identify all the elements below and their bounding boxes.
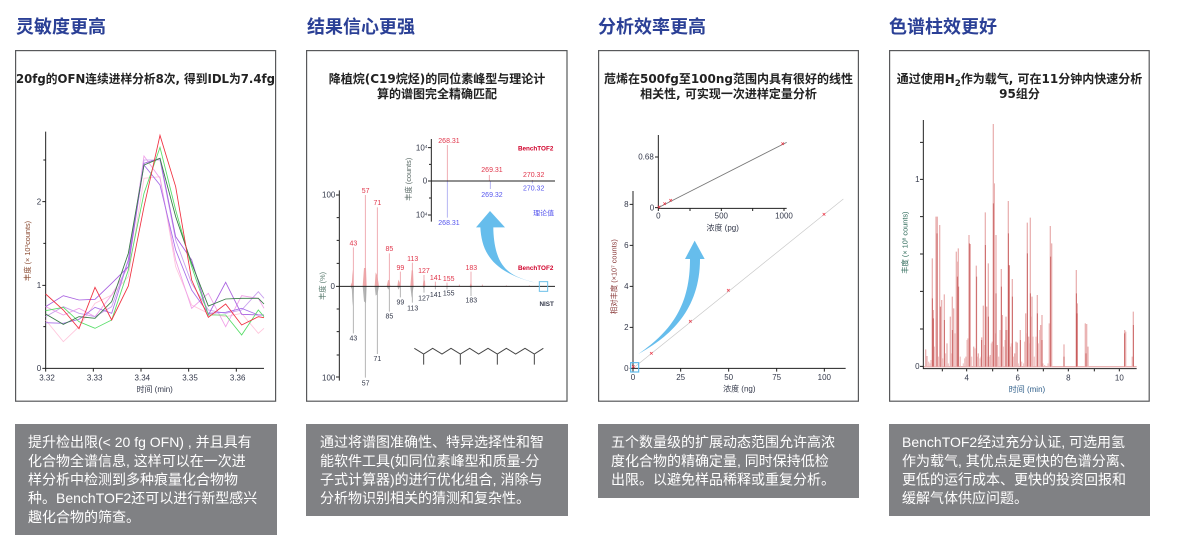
chart inset: isotope pattern: 270.32: [523, 172, 544, 179]
panel title: fluorene linearity: 苊烯在500fg至100ng范围内具有很好的线性: [604, 71, 853, 86]
text block: sensitivity: 化合物全谱信息, 这样可以在一次进: [28, 453, 246, 469]
blue zoom box: [631, 363, 639, 372]
chart inset: isotope pattern: 10: [416, 143, 425, 152]
text block: column performance: BenchTOF2经过充分认证, 可选用氢: [902, 434, 1125, 450]
arrow: zoom to low range: [638, 241, 705, 354]
text block: confidence: 分析物识别相关的猜测和复杂性。: [320, 490, 530, 506]
chart: overlaid OFN injections: 3.36: [230, 374, 246, 383]
chart: calibration curve ng: 相对丰度 (×10: [610, 268, 619, 314]
panel title: fluorene linearity: [604, 71, 853, 101]
chart inset: calibration curve pg: 0: [650, 203, 655, 212]
chart: overlaid OFN injections: 3.33: [87, 374, 103, 383]
chart: total ion chromatogram: [900, 120, 1137, 394]
chart: total ion chromatogram: 8: [901, 237, 906, 240]
text block: efficiency: [598, 424, 859, 498]
chart: calibration curve ng: 浓度 (ng): [723, 383, 756, 393]
chart inset: isotope pattern: 270.32: [523, 186, 544, 193]
chart inset: isotope pattern: 丰度 (counts): [404, 158, 413, 201]
text block: confidence: 能软件工具(如同位素峰型和质量-分: [320, 453, 539, 469]
text block: efficiency: 出限。以避免样品稀释或重复分析。: [611, 472, 835, 488]
chart: total ion chromatogram: counts): [900, 212, 909, 238]
chart: calibration curve ng: 100: [818, 373, 832, 382]
chart inset: isotope pattern: 268.31: [438, 138, 460, 145]
panel title: hydrogen carrier: 2: [955, 79, 961, 89]
chart: overlaid OFN injections: 3: [24, 245, 29, 248]
panel title: hydrogen carrier: 作为载气, 可在11分钟内快速分析: [961, 71, 1142, 86]
chart inset: calibration curve pg: [638, 135, 793, 232]
chart inset: isotope pattern: 269.32: [481, 192, 503, 199]
panel title: OFN IDL: 20fg的OFN连续进样分析8次, 得到IDL为7.4fg: [16, 71, 275, 86]
chart: mirror mass spectrum: 100: [322, 373, 336, 382]
chart: calibration curve ng: 25: [676, 373, 686, 382]
chart: mirror mass spectrum: 99: [396, 265, 404, 272]
chart: mirror mass spectrum: 丰度 (%): [318, 272, 327, 300]
chart: calibration curve ng: 4: [624, 282, 629, 291]
chart inset: isotope pattern: 10: [416, 211, 425, 220]
chart inset: isotope pattern: 0: [423, 177, 428, 186]
heading: column performance: 色谱柱效更好: [889, 16, 997, 37]
panel: efficiency: [599, 51, 858, 401]
text block: column performance: 更低的运行成本、更快的投资回报和: [902, 472, 1126, 488]
chart inset: calibration curve pg: 0.68: [638, 153, 654, 162]
panel title: hydrogen carrier: [897, 71, 1142, 101]
chart: mirror mass spectrum: 183: [466, 298, 477, 305]
chart: overlaid OFN injections: 时间 (min): [136, 384, 173, 394]
chart: overlaid OFN injections: 丰度 (× 10: [23, 248, 32, 281]
chart inset: isotope pattern: 4: [425, 144, 428, 149]
chart: overlaid OFN injections: [23, 132, 264, 394]
chart: mirror mass spectrum: 155: [443, 276, 455, 283]
chart: total ion chromatogram: 0: [915, 362, 920, 371]
icon: pristane structure: [414, 348, 543, 365]
chart inset: calibration curve pg: 0: [656, 212, 661, 221]
chart: mirror mass spectrum: BenchTOF2: [518, 265, 554, 272]
chart: total ion chromatogram: 6: [1015, 373, 1020, 382]
panel: column performance: [890, 51, 1149, 401]
panel title: fluorene linearity: 相关性, 可实现一次进样定量分析: [640, 86, 817, 101]
chart inset: calibration curve pg: 浓度 (pg): [706, 222, 739, 232]
chart: mirror mass spectrum: 43: [349, 241, 357, 248]
text block: sensitivity: 样分析中检测到多种痕量化合物物: [28, 472, 238, 488]
text block: sensitivity: 趣化合物的筛查。: [28, 509, 140, 525]
text block: efficiency: 五个数量级的扩展动态范围允许高浓: [611, 434, 835, 450]
chart inset: calibration curve pg: 500: [715, 212, 729, 221]
chart: mirror mass spectrum: 0: [330, 282, 335, 291]
chart: mirror mass spectrum: 141: [430, 292, 442, 299]
chart inset: calibration curve pg: 1000: [775, 212, 793, 221]
blue zoom box: [539, 282, 548, 291]
panel title: pristane: 降植烷(C19烷烃)的同位素峰型与理论计: [329, 71, 545, 86]
chart: total ion chromatogram: 8: [1066, 373, 1071, 382]
text block: sensitivity: 种。BenchTOF2还可以进行新型感兴: [28, 490, 257, 506]
chart: mirror mass spectrum: 85: [385, 314, 393, 321]
chart: mirror mass spectrum: 141: [430, 275, 442, 282]
chart: mirror mass spectrum: 113: [407, 306, 418, 313]
chart: mirror mass spectrum: 127: [418, 268, 430, 275]
chart: calibration curve ng: 2: [624, 323, 629, 332]
chart: mirror mass spectrum: 71: [373, 200, 381, 207]
chart: mirror mass spectrum: 183: [466, 265, 477, 272]
chart: calibration curve ng: 75: [772, 373, 782, 382]
chart: calibration curve ng: 7: [611, 265, 616, 268]
chart: total ion chromatogram: 1: [915, 175, 920, 184]
chart inset: isotope pattern: [404, 138, 555, 227]
text block: efficiency: 度化合物的精确定量, 同时保持低检: [611, 453, 829, 469]
chart: mirror mass spectrum: 127: [418, 296, 430, 303]
heading: efficiency: 分析效率更高: [598, 16, 706, 37]
chart: mirror mass spectrum: NIST: [539, 301, 554, 308]
chart: calibration curve ng: counts): [610, 239, 619, 265]
chart: total ion chromatogram: 4: [964, 373, 969, 382]
chart: total ion chromatogram: 10: [1115, 373, 1124, 382]
chart inset: isotope pattern: 268.31: [438, 220, 460, 227]
chart: calibration curve ng: 6: [624, 241, 629, 250]
chart: mirror mass spectrum: 85: [385, 246, 393, 253]
text block: sensitivity: 提升检出限(< 20 fg OFN) , 并且具有: [28, 434, 252, 450]
chart: mirror mass spectrum: 57: [362, 188, 370, 195]
chart inset: isotope pattern: BenchTOF2: [518, 146, 554, 153]
text block: column performance: 作为载气, 其优点是更快的色谱分离、: [902, 453, 1134, 469]
chart: mirror mass spectrum: 71: [373, 356, 381, 363]
chart inset: isotope pattern: 理论值: [533, 209, 554, 218]
chart: mirror mass spectrum: [318, 188, 555, 388]
heading: confidence: 结果信心更强: [307, 17, 415, 37]
text block: column performance: [889, 424, 1150, 516]
chart: overlaid OFN injections: 3.35: [182, 374, 198, 383]
chart: calibration curve ng: 50: [724, 373, 734, 382]
chart: calibration curve ng: [610, 191, 846, 393]
text block: sensitivity: [15, 424, 277, 535]
panel title: hydrogen carrier: 通过使用H: [897, 72, 955, 86]
panel title: pristane: [329, 71, 545, 101]
chart: mirror mass spectrum: 155: [443, 291, 455, 298]
heading: sensitivity: 灵敏度更高: [16, 16, 106, 37]
chart: mirror mass spectrum: 43: [349, 336, 357, 343]
text block: confidence: 子式计算器)的进行优化组合, 消除与: [320, 472, 542, 488]
chart: overlaid OFN injections: 3.34: [135, 374, 151, 383]
text block: column performance: 缓解气体供应问题。: [902, 490, 1028, 506]
chart inset: isotope pattern: 269.31: [481, 167, 503, 174]
chart: overlaid OFN injections: 2: [37, 197, 42, 206]
chart: calibration curve ng: 8: [624, 200, 629, 209]
chart: overlaid OFN injections: 3.32: [39, 374, 55, 383]
chart: mirror mass spectrum: 99: [396, 300, 404, 307]
chart: overlaid OFN injections: 1: [37, 281, 42, 290]
chart inset: isotope pattern: 4: [425, 211, 428, 216]
chart: calibration curve ng: 0: [624, 364, 629, 373]
arrow: zoom into isotope region: [476, 211, 535, 283]
text block: confidence: [306, 424, 568, 516]
panel: sensitivity: [16, 51, 276, 401]
chart: mirror mass spectrum: 100: [322, 191, 336, 200]
chart: calibration curve ng: 0: [631, 373, 636, 382]
text block: confidence: 通过将谱图准确性、特异选择性和智: [320, 434, 544, 450]
chart: mirror mass spectrum: 113: [407, 256, 418, 263]
chart: total ion chromatogram: 时间 (min): [1009, 384, 1046, 394]
panel title: pristane: 算的谱图完全精确匹配: [377, 86, 497, 101]
chart: overlaid OFN injections: 0: [37, 364, 42, 373]
chart: overlaid OFN injections: counts): [23, 221, 32, 245]
panel title: hydrogen carrier: 95组分: [999, 86, 1040, 101]
chart: mirror mass spectrum: 57: [362, 381, 370, 388]
panel: confidence: [307, 51, 567, 401]
chart: total ion chromatogram: 丰度 (× 10: [900, 240, 909, 274]
